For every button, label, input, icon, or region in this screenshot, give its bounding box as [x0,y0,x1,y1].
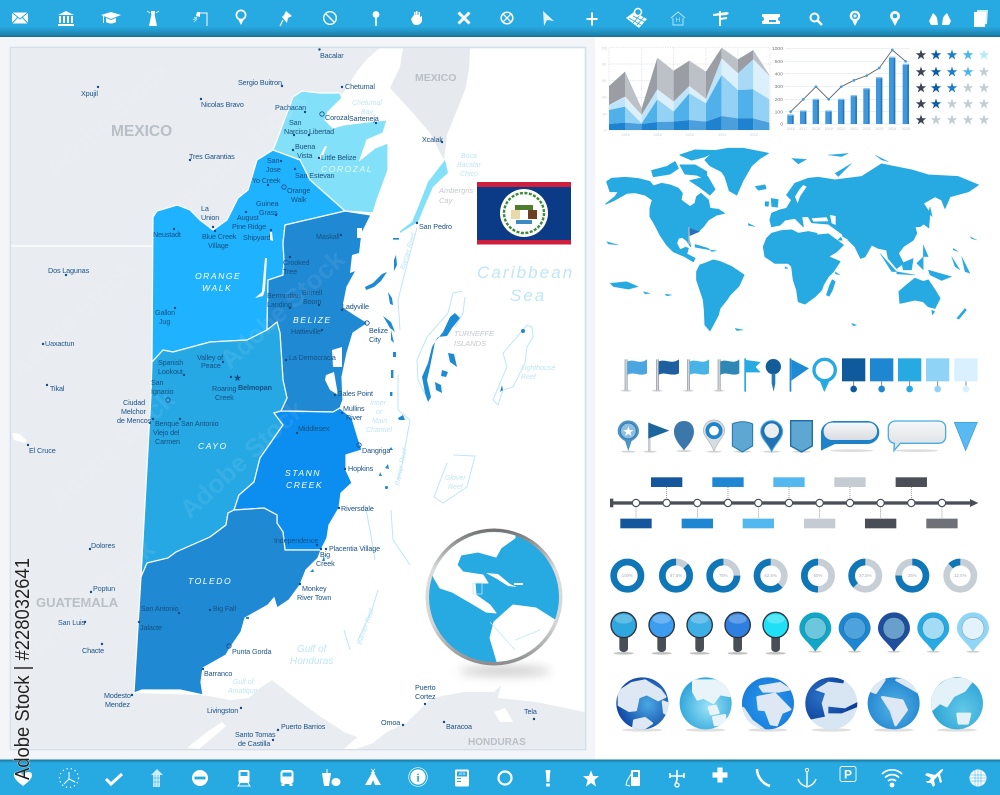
water labels: Reef [448,484,464,491]
icon: hotel: H [676,17,681,24]
area chart: 60 [602,79,606,83]
city labels: River [346,413,363,422]
area chart: 40 [602,96,606,100]
donut charts: 50% [814,573,822,578]
water labels: Cay [439,196,454,205]
land: Mexico and Guatemala [11,48,380,749]
city labels: Sergio Buitron [238,78,282,87]
flag of Belize [477,182,571,244]
city labels: San Antonio [181,419,219,428]
city labels [29,51,537,748]
city labels: Yo Creek [252,176,281,185]
city labels: Maskall [316,232,340,241]
district labels: COROZAL [321,164,373,174]
district labels: STANN [285,468,321,478]
water labels: Honduras [290,656,333,667]
stock watermarks: Adobe Stock [24,534,161,664]
city labels: Union [201,213,219,222]
city labels: de Castilla [238,739,270,748]
land: Guatemala and Honduras south [134,680,585,749]
stock watermarks: Adobe Stock [4,254,141,384]
city labels: Chacte [82,646,104,655]
water labels: Gulf of [233,679,255,686]
city labels: Uaxactun [45,339,75,348]
icon: anchor [798,768,816,787]
city labels: Poptun [93,584,115,593]
city labels: Boom [303,297,321,306]
city labels: Gales Point [337,389,373,398]
city labels: Baracoa [446,722,472,731]
water labels: Gulf of [297,644,328,655]
bar and line chart: 400 [775,71,783,77]
city labels: Jose [266,165,281,174]
city labels: Ladyville [342,302,369,311]
stock watermarks: Adobe Stock [174,394,311,524]
icon row: flags, pins and swatches [621,358,978,392]
icon: two hands [929,13,951,25]
region labels: MEXICO [415,72,456,84]
water labels: Barrier Reef [356,607,376,646]
bar and line chart [772,46,910,131]
map panel [4,48,586,750]
city labels: Tela [524,707,537,716]
water labels: Inner [370,400,387,407]
city labels: Libertad [309,127,334,136]
city labels: Pine Ridge [232,222,266,231]
background panel: map side [0,36,595,760]
city labels: Riversdale [341,504,374,513]
city labels: Big [320,550,330,559]
district: Orange Walk [152,150,345,362]
globe: South America [867,677,922,732]
water labels: Reef [521,374,537,381]
icon: target pin [850,11,860,26]
water labels [227,100,555,695]
globes [615,677,985,732]
bar and line chart: 2017 [799,127,807,131]
icon: cross [458,12,470,24]
icon: heart [14,772,32,786]
water labels: Main [372,418,387,425]
city labels: Jalacte [140,623,162,632]
icon: ring [498,772,512,784]
donut charts: 12,5% [954,573,967,578]
icon: street lamp [193,12,207,26]
icon: tall building [151,769,163,787]
South America [697,260,744,331]
city labels: Omoa [381,718,400,727]
icon: wifi [882,770,902,787]
inland seas [795,185,848,242]
area chart: 100 [601,47,607,51]
icon: map pin ring [236,10,246,25]
city labels: Viejo del [153,428,180,437]
icon: information: i [416,770,420,784]
city labels: Tres Garantias [189,152,235,161]
icon row: markers and speech bubbles [618,420,977,453]
bar and line chart: 2025 [902,127,910,131]
district labels: ORANGE [195,271,241,281]
city labels: Creek [316,559,335,568]
icon: parking [840,766,856,782]
icon: bus [280,770,294,786]
top icon bar [0,0,1000,37]
city labels: Roaring [212,384,236,393]
water labels: Barrier Reef [394,447,409,486]
region labels: MEXICO [111,123,172,140]
city labels: Mendez [105,700,130,709]
icon: prohibited [324,12,336,24]
city labels: Creek [215,393,234,402]
city labels: Valley of [197,353,223,362]
globe: Europe [804,677,859,732]
area chart: 0 [604,129,606,133]
Eurasia [770,164,978,268]
city labels: Xpujil [81,89,98,98]
city labels: Pachacan [275,103,306,112]
city labels: Dos Lagunas [48,266,90,275]
region labels [36,72,574,748]
water labels: Ambergris [438,186,473,195]
city labels: Little Belize [321,153,356,162]
icon: ATM [455,770,469,786]
land: Mexico east [390,48,470,160]
city labels: Puerto Barrios [281,722,326,731]
bar and line chart: 2019 [825,127,833,131]
bar and line chart: 300 [775,84,783,90]
city labels: Xcalak [422,135,443,144]
bar and line chart: 500 [775,59,783,65]
icon: graduation cap [101,12,121,24]
icon: magnifier [810,14,822,25]
Ambergris Caye [400,160,448,233]
icon: tent [365,769,381,785]
city labels: San Luis [58,618,86,627]
stock watermarks: Adobe Stock [174,84,311,214]
city labels: Nicolas Bravo [201,100,244,109]
city labels: Burrell [302,288,322,297]
icon: push pin [280,11,292,26]
icon: no entry [192,770,208,786]
Madagascar [827,280,835,296]
icon: fuel pump [626,770,640,786]
city labels: Belize [369,326,388,335]
area chart: 2020 [686,133,694,137]
flat map pins [799,612,989,653]
water labels: ISLANDS [454,339,486,348]
Canadian Arctic islands [652,150,717,195]
city labels: Dolores [91,541,115,550]
city labels: Carmen [155,437,180,446]
glass pins [611,612,788,655]
donut charts: 87,5% [670,573,682,578]
city labels: Jug [159,317,170,326]
icon: star [583,770,599,786]
area chart: 2016 [622,133,630,137]
city labels: Chetumal [345,82,375,91]
donut charts [614,556,980,595]
city labels: San Estevan [295,171,335,180]
city labels: de Mencos [117,416,152,425]
city labels: Village [208,241,229,250]
map flag [688,227,700,244]
city labels: Guinea [256,199,279,208]
water labels: Lighthouse [521,365,555,372]
icon: circled cross [501,12,513,24]
water labels: Bay [361,109,374,116]
city labels: City [369,335,381,344]
city labels: Orange [287,186,310,195]
city labels: Tikal [50,384,65,393]
icon: crossroad [586,12,598,26]
city markers [27,48,535,741]
district labels: WALK [202,283,232,293]
region labels: Sea [510,286,546,305]
North America [606,177,724,262]
bar and line chart: 1000 [772,46,783,52]
district: Cayo [141,322,287,577]
coastal islands [246,238,525,619]
icon: drink and burger [322,769,340,786]
icon: lighthouse [147,11,159,26]
bar and line chart: 0 [780,122,783,128]
water labels: Amatique [227,688,258,695]
region labels: Caribbean [477,263,574,282]
bottom icon bar [0,760,1000,795]
bar and line chart: 200 [775,97,783,103]
city labels: Punta Gorda [232,647,272,656]
city labels: Tree [283,267,297,276]
Turneffe Islands [422,313,460,402]
city labels: Narciso [284,127,308,136]
donut charts: 100% [622,573,633,578]
city labels: San [267,156,280,165]
city labels: Placentia Village [329,544,380,553]
stock watermarks [42,96,346,654]
area chart: 2021 [718,133,726,137]
district: Belize [267,211,371,412]
city labels: River Town [297,593,331,602]
water labels: Chico [460,171,478,178]
bar and line chart: 2018 [812,127,820,131]
city labels: Bacalar [320,51,344,60]
city labels: San Antonio [141,604,179,613]
Caribbean islands [695,153,888,252]
city labels: Hopkins [348,464,374,473]
donut charts: 75% [719,573,728,578]
water labels: Chetumal [352,100,382,107]
city labels: Melchor [121,407,146,416]
city labels: Bermudian [267,291,301,300]
city labels: Mullins [343,404,365,413]
city labels: Corozal [325,113,349,122]
city labels: Independence [274,536,318,545]
Arabian Peninsula [818,234,843,257]
water labels: Glover [445,475,466,482]
icon: ticket [762,14,780,24]
water labels: TURNEFFE [454,329,495,338]
globe: Oceania [930,677,985,732]
city labels: Buena [295,142,315,151]
district labels: BELIZE [293,315,332,325]
area chart: 2018 [654,133,662,137]
district: Toledo [134,508,321,695]
icon: dotted clock [60,768,78,788]
bar and line chart: 2016 [787,127,795,131]
icon: document [974,10,988,27]
icon: airplane [925,769,943,787]
city labels: Middlesex [298,424,330,433]
city labels: Cortez [415,692,436,701]
city labels: Santo Tomas [235,730,276,739]
district: Stann Creek [234,408,362,550]
city labels: Grass [259,208,278,217]
stock watermarks: Adobe Stock [39,54,176,184]
district: Corozal [273,91,388,213]
stock id watermark: Adobe Stock | #228032641 [12,558,34,780]
city labels: Dangriga [362,446,390,455]
icon: hotel [671,12,685,25]
bar and line chart: 100 [775,109,783,115]
icon: information [409,768,427,786]
water labels: Boca [461,153,477,160]
city labels: Gallon [155,308,175,317]
icon: exclamation mark [546,770,550,786]
icon: round pin [373,11,379,26]
Australia [899,278,940,308]
city labels: Ciudad [123,398,145,407]
globe: Africa [741,677,796,732]
rivers and lagoons [255,146,362,395]
bar and line chart: 2021 [850,127,858,131]
stock watermarks: Adobe Stock [44,384,181,514]
icon: train [238,770,250,786]
city labels: Puerto [415,683,436,692]
icon: signpost [713,11,729,26]
city labels: Crooked [283,258,309,267]
donut charts: 37,5% [859,573,872,578]
city labels: Modesto [104,691,131,700]
city labels: Lookout [158,367,183,376]
district labels: CREEK [286,480,323,490]
water labels: Channel [366,427,393,434]
icon: plus [712,768,728,782]
city labels: Neustadt [153,230,181,239]
region labels: GUATEMALA [36,595,119,610]
icon: ATM: ATM [459,772,466,776]
city labels: Landing [267,300,292,309]
city labels: Big Fall [213,604,237,613]
Japan and Asian islands [880,207,977,281]
city labels: Barranco [204,669,232,678]
icon: tools [670,770,684,787]
donut charts: 25% [908,573,917,578]
icon: envelope [12,12,28,24]
district labels [188,164,373,586]
icon: telephone [757,769,770,786]
reef outlines [344,228,533,650]
world map [606,148,978,331]
bar and line chart: 2024 [888,127,896,131]
city labels: August [237,213,259,222]
city labels: Peace [201,361,221,370]
stock watermarks: Adobe Stock [224,554,361,684]
bar and line chart: 2023 [875,127,883,131]
district labels: CAYO [198,441,228,451]
locator globe [420,520,565,680]
city labels: San Pedro [419,222,452,231]
icon: globe [970,770,986,786]
city labels: Blue Creek [202,232,237,241]
city labels: La Democracia [289,353,336,362]
timeline [610,477,978,528]
icon: parking: P [844,768,852,782]
area chart: 2022 [750,133,758,137]
city labels: Sarteneja [349,114,379,123]
icon: ring pin [890,11,900,26]
bar and line chart: 2022 [863,127,871,131]
area chart: 80 [602,63,606,67]
icon: bank [58,11,74,26]
water labels: Barrier Reef [399,232,418,271]
city labels: San [151,378,164,387]
globe: Asia [678,677,733,732]
city labels: El Cruce [29,446,56,455]
icon: navigation arrow [543,11,554,26]
icon: map with pin [626,8,647,28]
city labels: Hattieville [291,327,321,336]
city labels: Spanish [158,358,183,367]
city labels: Vista [297,151,312,160]
city labels: La [201,204,209,213]
Greenland [705,148,768,195]
city labels: Walk [291,195,307,204]
globe: Americas [615,677,670,732]
stock watermarks: Adobe Stock [214,244,351,374]
area chart [601,47,770,137]
city labels: San [289,118,302,127]
district labels: TOLEDO [188,576,232,586]
bar and line chart: 2020 [837,127,845,131]
city labels: Shipyard [243,233,271,242]
Africa [763,230,840,304]
city labels: Monkey [302,584,327,593]
region labels: HONDURAS [468,737,526,748]
city labels: Belmopan [238,383,272,392]
city labels: Livingston [207,706,238,715]
city labels: Benque [155,419,179,428]
donut charts: 62,5% [765,573,777,578]
star ratings [916,50,989,124]
water labels: Bacalar [457,162,481,169]
water labels: or [376,409,383,416]
area chart: 20 [602,112,606,116]
icon: check mark [106,774,122,784]
city labels: Ignacio [151,387,173,396]
icon: hand [411,11,422,25]
